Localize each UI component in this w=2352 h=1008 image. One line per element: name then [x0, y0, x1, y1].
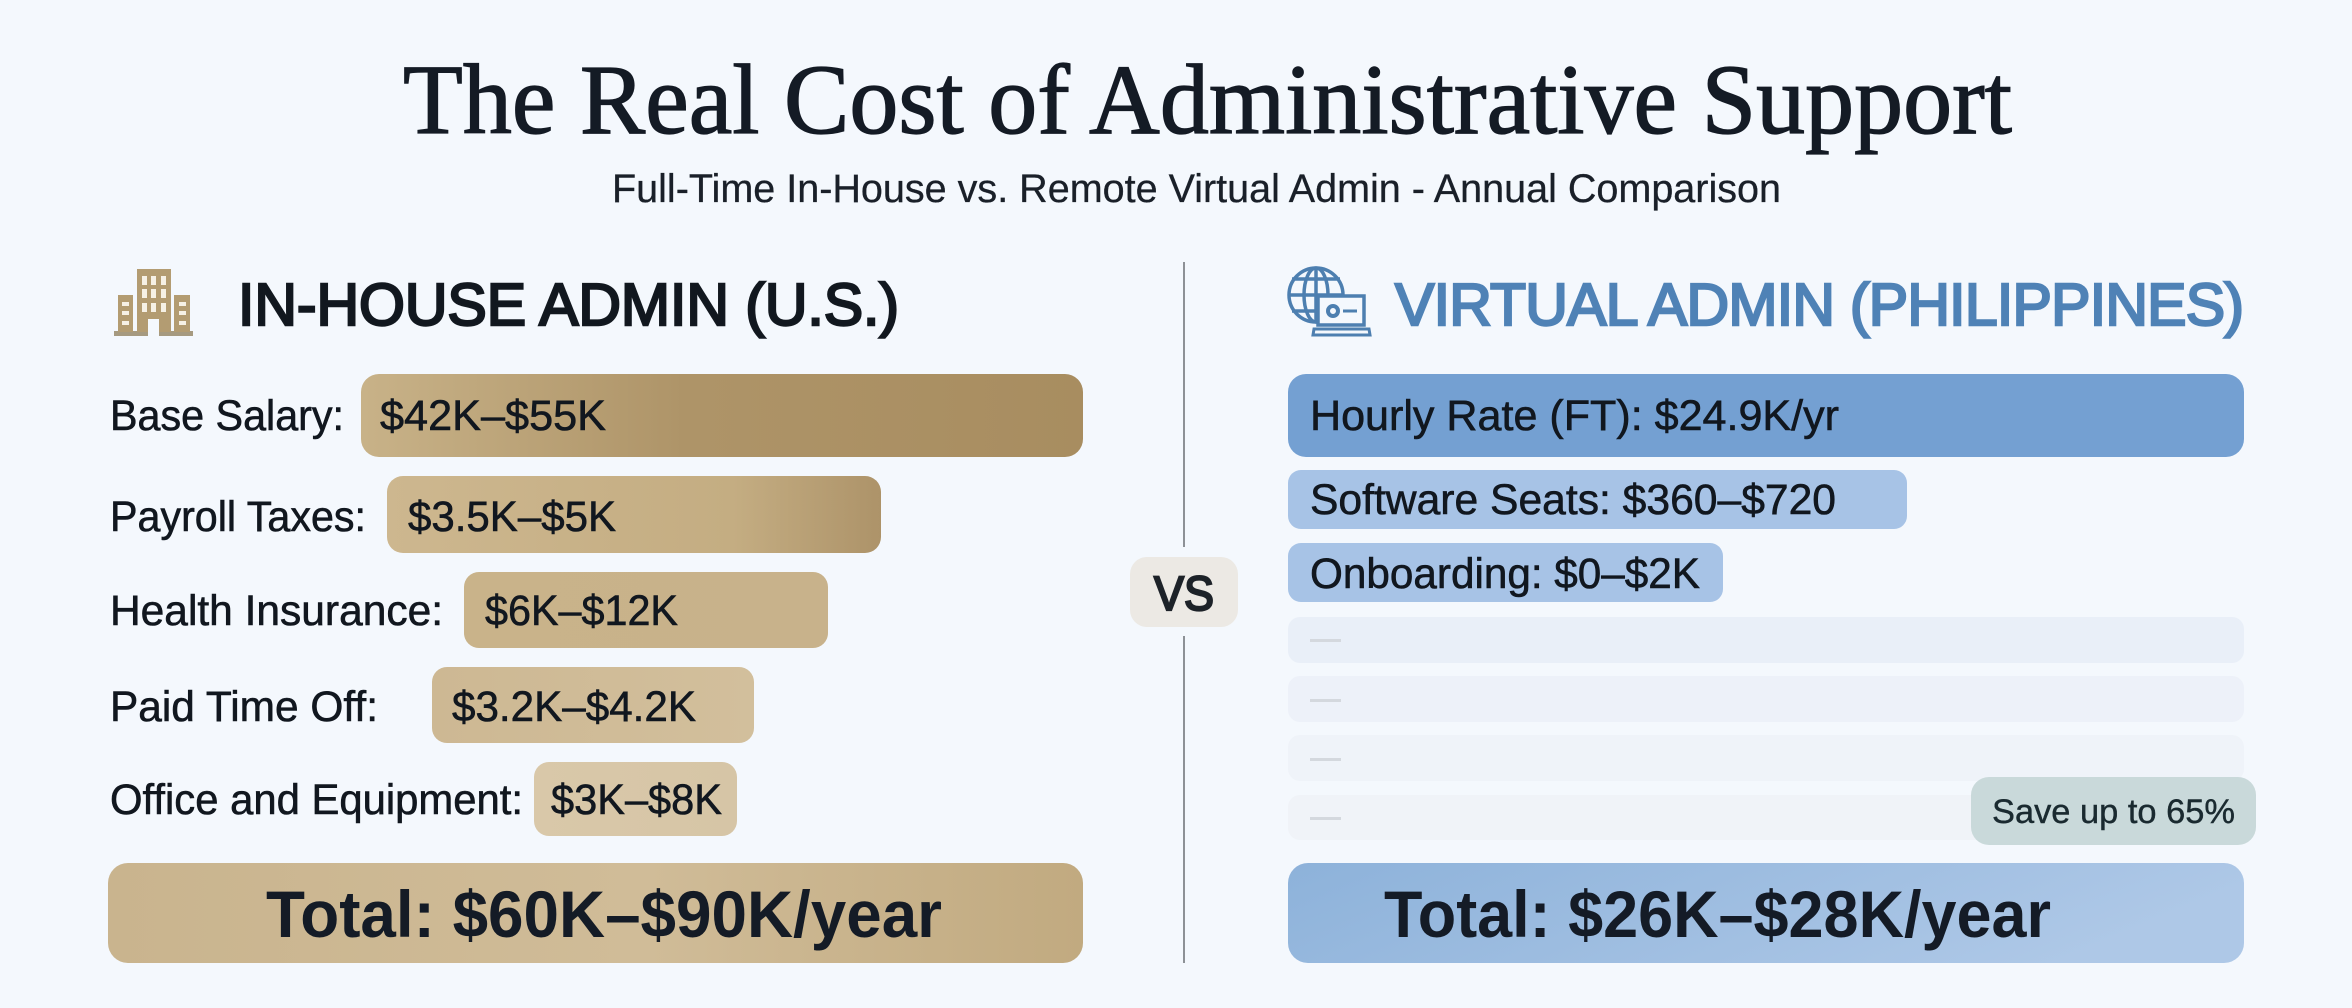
VS badge — [1130, 557, 1238, 627]
callout: save up to 65% — [1971, 777, 2256, 845]
row: health insurance — [110, 572, 828, 648]
row: base salary: $42K–$55K — [380, 392, 606, 440]
total: in-house: Total: $60K–$90K/year — [266, 877, 942, 951]
icon: globe and laptop — [1289, 268, 1370, 335]
row: health insurance: Health Insurance: — [110, 587, 443, 635]
row: base salary — [110, 374, 1083, 457]
total: in-house — [108, 863, 1083, 963]
row: paid time off: Paid Time Off: — [110, 683, 378, 731]
subtitle: Full-Time In-House vs. Remote Virtual Admin - Annual Comparison — [612, 167, 1781, 211]
row: paid time off — [110, 667, 754, 743]
icon: office buildings — [114, 269, 193, 336]
empty row 3 — [1288, 735, 2244, 781]
title: The Real Cost of Administrative Support — [403, 44, 2012, 155]
row: payroll taxes: Payroll Taxes: — [110, 493, 366, 541]
row: office and equipment: Office and Equipment: — [110, 776, 523, 824]
row: paid time off: $3.2K–$4.2K — [452, 683, 696, 731]
panel: virtual admin — [1288, 268, 2256, 963]
row: base salary: Base Salary: — [110, 392, 344, 440]
total: virtual: Total: $26K–$28K/year — [1384, 877, 2051, 951]
row: office and equipment — [110, 762, 737, 836]
row: health insurance: $6K–$12K — [485, 587, 678, 635]
empty row 1 — [1288, 617, 2244, 663]
bar: software seats: Software Seats: $360–$720 — [1310, 476, 1836, 524]
row: payroll taxes: $3.5K–$5K — [408, 493, 616, 541]
center divider with VS badge — [1130, 262, 1238, 963]
heading: in-house admin: IN-HOUSE ADMIN (U.S.) — [238, 272, 899, 338]
total: virtual — [1288, 863, 2244, 963]
empty row 4 — [1288, 795, 2244, 840]
bar: software seats — [1288, 470, 1907, 529]
row: office and equipment: $3K–$8K — [551, 776, 722, 824]
panel: in-house admin — [108, 269, 1083, 963]
bar: onboarding: Onboarding: $0–$2K — [1310, 550, 1700, 598]
VS badge: VS — [1154, 568, 1214, 621]
bar: hourly rate: Hourly Rate (FT): $24.9K/yr — [1310, 392, 1839, 440]
callout: save up to 65%: Save up to 65% — [1992, 793, 2235, 831]
bar: hourly rate — [1288, 374, 2244, 457]
row: payroll taxes — [110, 476, 881, 553]
heading: virtual admin: VIRTUAL ADMIN (PHILIPPINES) — [1395, 272, 2244, 338]
empty row 2 — [1288, 676, 2244, 722]
